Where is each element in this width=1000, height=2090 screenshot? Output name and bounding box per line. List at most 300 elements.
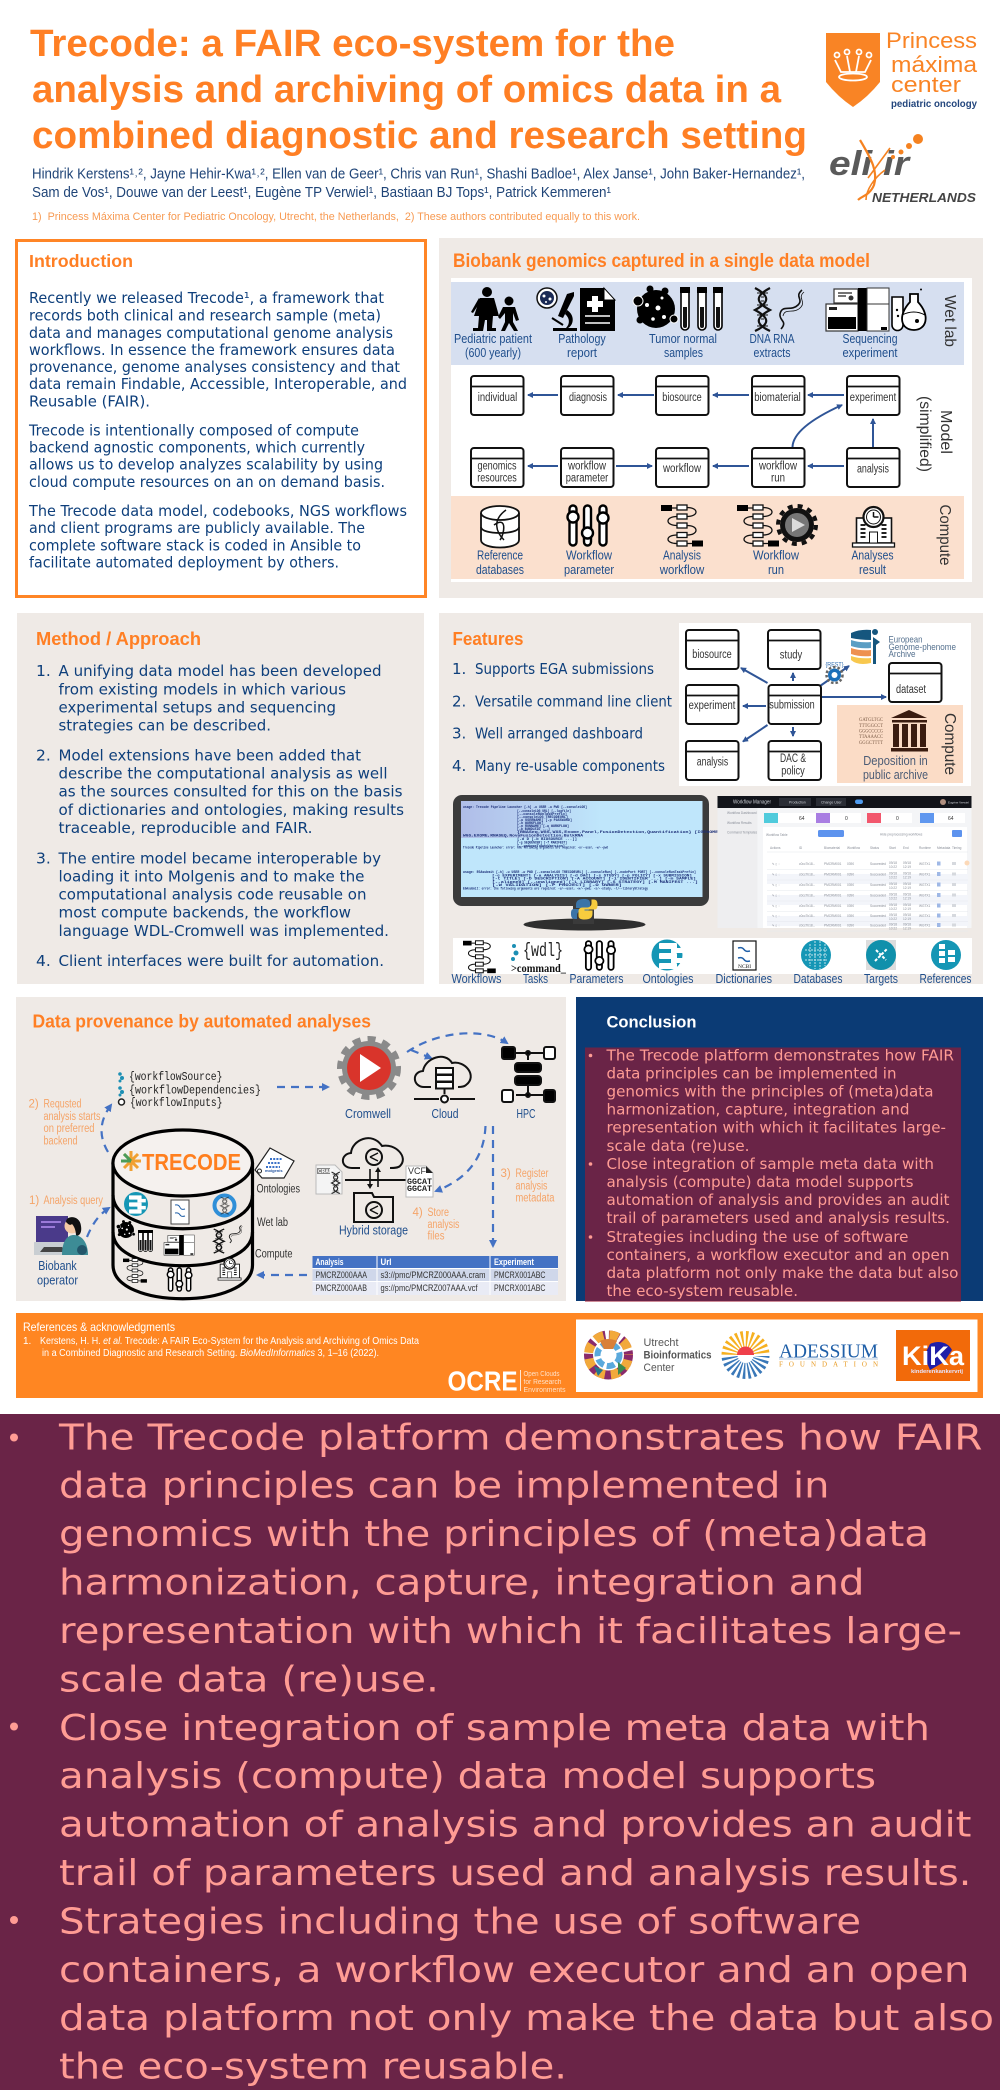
table: analysis metadata: s3://pmc/PMCRZ000AAA.cram <box>380 1270 486 1280</box>
text: terminal output: [-n RUNNAME] [-w WORKFLOW] <box>517 824 569 829</box>
list: method steps: A unifying data model has been developed <box>58 662 382 680</box>
list: method steps <box>36 662 404 970</box>
boxes: EGA model <box>686 630 942 780</box>
cards: status counters: 0 <box>845 816 848 822</box>
logo: OCRE: for Research <box>524 1379 562 1386</box>
panel: data provenance <box>16 997 566 1301</box>
highlight box: conclusion text: Close integration of sample meta data with <box>606 1155 934 1173</box>
text: sequences <box>859 718 884 746</box>
list: features: 4. <box>452 757 466 775</box>
arrows: dashed flow <box>87 1033 507 1275</box>
annotation: register metadata: analysis <box>516 1180 548 1192</box>
labels: EGA boxes <box>689 649 927 778</box>
list: method steps: most compute backends, the workflow <box>58 904 351 922</box>
table: analysis metadata: gs://pmc/PMCRZ007AAA.vcf <box>380 1283 478 1293</box>
icon: sequencing experiment <box>826 288 926 331</box>
text: references: References & acknowledgments <box>23 1320 175 1334</box>
annotation: store analysis files: analysis <box>428 1219 460 1231</box>
label: hybrid storage: Hybrid storage <box>339 1222 408 1238</box>
text block: introduction: workflows. In essence the framework ensures data <box>29 342 395 359</box>
icon: HPC <box>502 1047 555 1102</box>
text block: introduction: Trecode is intentionally composed of compute <box>28 422 359 440</box>
text: sequences: GATGLTGC <box>859 718 884 723</box>
text: terminal output: [--aligned] [--unaligned] [-L LIBRARY] [-S STRATEGY] [-M MANIFEST ...] <box>492 880 698 885</box>
heading: introduction: Introduction <box>29 251 133 271</box>
text block: conclusion enlarged: automation of analysis and provides an audit <box>59 1804 972 1846</box>
highlight box: conclusion text: harmonization, capture, integration and <box>606 1100 910 1118</box>
labels: model boxes: biomaterial <box>754 392 801 404</box>
labels: wet lab: Pathology <box>558 331 606 346</box>
icon: VCF file: GGCAT <box>407 1178 432 1187</box>
table: workflow table: Metadata <box>937 846 951 850</box>
title: analysis and archiving of omics data in a <box>32 69 782 111</box>
icon: parameters <box>584 941 615 970</box>
list: method steps: describe the computational analysis as well <box>58 764 388 782</box>
table: workflow table: Hide preprocessing workflows <box>880 832 923 836</box>
box: compute deposition: Compute <box>941 713 958 775</box>
icon: references <box>931 940 961 970</box>
annotation: register metadata: 3) <box>500 1168 511 1180</box>
icon: databases <box>801 940 831 970</box>
highlight box: conclusion text: Strategies including the use of software <box>606 1228 908 1246</box>
text: dashboard header: Change User <box>821 800 842 804</box>
logo: OCRE: Open Clouds <box>524 1371 560 1378</box>
table: workflow table: Workflow <box>847 846 861 850</box>
labels: compute: result <box>859 562 886 577</box>
logo: Utrecht Bioinformatics Center <box>588 1335 712 1376</box>
labels: wet lab <box>454 331 898 360</box>
table: analysis metadata: Experiment <box>494 1257 534 1267</box>
icon: DNA RNA extracts <box>755 288 804 331</box>
icon: wdl tasks <box>511 940 567 975</box>
table: workflow table: Workflow Table <box>766 833 788 837</box>
text block: introduction: facilitate automated deployment by others. <box>29 554 339 572</box>
title: combined diagnostic and research setting <box>32 115 807 157</box>
annotation: register metadata: metadata <box>516 1192 555 1204</box>
text block: conclusion enlarged: scale data (re)use. <box>59 1660 439 1700</box>
list: features: 2. <box>452 692 466 710</box>
label: biobank operator: operator <box>37 1272 79 1288</box>
cards: status counters: 0 <box>896 816 899 822</box>
table: workflow table: End <box>903 846 909 850</box>
labels: compute: Analysis <box>663 548 701 562</box>
list: features: 1. <box>452 660 466 678</box>
logo: Utrecht Bioinformatics Center: Bioinformatics <box>644 1350 712 1362</box>
logo: KiKa: kinderenkankervrij <box>911 1369 964 1375</box>
text: terminal output: [--genomeTokenVersion] <box>517 844 565 849</box>
text: terminal output: [-u USERNAME] [-p PASSWORD] <box>517 818 572 823</box>
label: model vertical: (simplified) <box>916 396 933 472</box>
icon: archive temple <box>891 710 928 752</box>
labels: database layers: Ontologies <box>256 1184 300 1196</box>
panel: enlarged conclusion text <box>0 1414 1000 2090</box>
icon: tumor normal samples <box>633 286 723 330</box>
labels: components: Targets <box>864 971 898 986</box>
text: sequences: GGGCTTTT <box>859 741 883 746</box>
labels: wet lab: Sequencing <box>842 331 898 346</box>
list: method steps: strategies can be described. <box>58 716 271 734</box>
icon: pediatric patient <box>471 287 519 331</box>
text: terminal output: [--consoleLOG_TRECODEURL] <box>517 815 568 820</box>
labels: wet lab: Pediatric patient <box>454 331 532 346</box>
table: analysis metadata: Url <box>380 1257 392 1267</box>
labels: compute <box>476 548 894 577</box>
labels: model boxes: parameter <box>566 472 608 484</box>
annotation: analysis query <box>29 1195 103 1207</box>
text: sequences: TTTGGCCT <box>859 724 883 729</box>
text: terminal output: Trecode Pipeline Launcher: error: the following arguments are required: -u/--user, -w/--pwd <box>463 846 608 850</box>
icon: dictionaries: NCBI <box>738 964 751 970</box>
heading: features: Features <box>452 628 524 649</box>
logo: Adessium Foundation <box>721 1339 878 1380</box>
diagram: data model <box>471 376 954 487</box>
labels: backends: Cromwell <box>345 1106 391 1121</box>
logo: European Genome-phenome Archive: Archive <box>888 649 916 660</box>
icon: VCF file: VCF <box>408 1166 427 1176</box>
labels: components: Parameters <box>570 971 624 986</box>
table: workflow table: Status <box>870 846 879 850</box>
labels: model boxes <box>477 392 897 484</box>
text block: introduction: provenance, genome analyses consistency and that <box>29 359 400 376</box>
annotation: register metadata: Register <box>516 1168 549 1180</box>
labels: compute: Workflow <box>753 548 800 562</box>
text block: introduction: data remain Findable, Accessible, Interoperable, and <box>29 376 407 393</box>
annotation: register metadata <box>500 1168 555 1204</box>
icon: ontologies <box>652 940 683 970</box>
text: terminal output: WGS,EXOME,RNASEQ,NovaFusionDetection,BulkRNA <box>463 834 584 838</box>
labels: database layers: Wet lab <box>257 1217 288 1229</box>
labels: wet lab: report <box>567 345 597 360</box>
table: analysis metadata: Analysis <box>316 1257 344 1267</box>
labels: EGA boxes: submission <box>769 700 815 712</box>
label: biobank operator <box>37 1258 79 1288</box>
text block: introduction: complete software stack is coded in Ansible to <box>29 538 361 554</box>
text: terminal output: EGAsubmit: error: the following arguments are required: -u/--user, -w/--pwd, -s/--study, -l/--libraryStrategy <box>463 886 649 892</box>
text block: introduction: and client programs are publicly available. The <box>29 520 365 537</box>
icons: wet lab layer <box>116 1220 242 1255</box>
labels: model boxes: individual <box>478 392 517 404</box>
logo: Princess Maxima Center <box>826 28 978 110</box>
text: terminal output: usage: Trecode Pipeline Launcher [-h] -u USER -w PWD [--consoleLOG] <box>463 805 587 810</box>
label: wet lab vertical: Wet lab <box>941 295 958 347</box>
icon: workflows <box>463 941 496 973</box>
text block: conclusion enlarged: data platform not only make the data but also <box>59 1998 994 2039</box>
table: workflow table: Runtime <box>919 846 931 850</box>
label: model vertical: Model <box>937 410 954 454</box>
boxes: model row 1 <box>471 376 900 415</box>
heading: biobank: Biobank genomics captured in a single data model <box>453 251 870 272</box>
labels: EGA boxes: policy <box>781 766 805 778</box>
labels: model boxes: run <box>771 472 785 484</box>
panel: features <box>439 613 983 986</box>
logo: Adessium Foundation: FOUNDATION <box>779 1360 878 1368</box>
text block: introduction: cloud compute resources on an on demand basis. <box>29 474 385 491</box>
labels: backends: Cloud <box>432 1106 458 1121</box>
labels: backends <box>345 1106 536 1121</box>
labels: model boxes: workflow <box>662 463 702 475</box>
icon: pathology report <box>537 288 615 331</box>
list: method steps: 4. <box>36 952 51 970</box>
labels: model boxes: biosource <box>662 392 702 404</box>
logo: ELIXIR Netherlands <box>829 134 976 205</box>
highlight box: conclusion text: representation with which it facilitates large- <box>606 1118 946 1136</box>
list: method steps: as the sources consulted for this on the basis <box>58 782 402 800</box>
highlight box: conclusion text: containers, a workflow executor and an open <box>606 1246 950 1264</box>
labels: compute: Analyses <box>852 548 894 562</box>
text block: conclusion enlarged: containers, a workflow executor and an open <box>59 1950 970 1991</box>
text block: conclusion enlarged: the eco-system reusable. <box>59 2046 567 2088</box>
label: model vertical <box>916 396 954 472</box>
text block: introduction: Reusable (FAIR). <box>29 394 150 410</box>
icons: compute layer <box>123 1258 241 1291</box>
annotation: store analysis files: Store <box>428 1207 449 1219</box>
text: dashboard header: Workflow Manager <box>733 800 771 806</box>
text: terminal output <box>463 805 724 892</box>
text: terminal output: [-g SEQUENCER] [-f MANIFEST] <box>517 840 567 846</box>
highlight box: conclusion text: automation of analysis and provides an audit <box>606 1191 950 1209</box>
text: terminal output: {RNASeq,WGS,WXS,Exome,Panel,FusionDetection,Quantification} [IGENOMES] <box>517 830 724 835</box>
list: method steps: The entire model became interoperable by <box>58 850 381 868</box>
labels: database layers: Compute <box>255 1248 292 1260</box>
labels: EGA boxes: DAC & <box>780 753 806 765</box>
icon: wdl tasks: {wdl} <box>523 940 563 962</box>
annotation: store analysis files: 4) <box>412 1207 423 1219</box>
labels: model boxes: analysis <box>857 464 889 476</box>
table: analysis metadata: PMCRX001ABC <box>494 1283 546 1293</box>
labels: compute: parameter <box>564 562 615 577</box>
boxes: model row 2 <box>471 448 900 487</box>
text block: conclusion enlarged: genomics with the principles of (meta)data <box>59 1514 929 1555</box>
text block: conclusion enlarged: The Trecode platform demonstrates how FAIR <box>58 1418 983 1458</box>
labels: compute: Reference <box>477 548 523 562</box>
diagram: EGA submission <box>679 623 971 786</box>
affiliations: 1) Princess Máxima Center for Pediatric Oncology, Utrecht, the Netherlands, 2) These authors contributed equally to this work. <box>32 211 640 223</box>
labels: EGA boxes: study <box>780 650 802 662</box>
icon: Trecode flower <box>121 1151 141 1171</box>
annotation: requested analysis: backend <box>44 1136 78 1148</box>
text: references: in a Combined Diagnostic and Research Setting. BioMedInformatics 3, 1–16 (2022). <box>42 1348 379 1359</box>
panel: method / approach <box>17 613 424 984</box>
icon: VCF file <box>406 1166 433 1197</box>
text block: introduction: data and manages computational genome analysis <box>29 325 393 342</box>
logo: KiKa <box>896 1330 970 1381</box>
text block: introduction: The Trecode data model, codebooks, NGS workflows <box>28 503 407 520</box>
table: workflow table: Actions <box>770 846 781 850</box>
annotation: analysis query: 1) <box>29 1195 39 1207</box>
label: biobank operator: Biobank <box>38 1258 77 1273</box>
labels: EGA boxes: dataset <box>896 684 927 696</box>
icon: REST gear <box>826 662 844 683</box>
highlight box: conclusion text: trail of parameters used and analysis results. <box>606 1209 950 1227</box>
cards: status counters: 64 <box>948 816 954 822</box>
text block: conclusion enlarged: representation with which it facilitates large- <box>59 1611 962 1652</box>
labels: wet lab: (600 yearly) <box>465 345 521 360</box>
highlight box: conclusion text: scale data (re)use. <box>606 1137 750 1155</box>
table: analysis metadata: PMCRZ000AAA <box>316 1270 367 1280</box>
logo: Adessium Foundation: ADESSIUM <box>779 1340 878 1362</box>
icon: Cromwell gear <box>340 1039 398 1097</box>
annotation: requested analysis: Requsted <box>44 1098 82 1110</box>
labels: model boxes: diagnosis <box>569 392 607 404</box>
text: references: 1. <box>23 1336 31 1347</box>
text: terminal output: [-h WORKFLOW] <box>517 821 543 826</box>
authors <box>32 166 805 201</box>
text: dashboard sidebar: Workflow Results <box>727 821 752 825</box>
heading: method: Method / Approach <box>36 628 201 649</box>
icons: ontology layer <box>124 1192 234 1224</box>
arrows: submission relations <box>741 666 886 742</box>
highlight box: conclusion text: analysis (compute) data model supports <box>606 1173 914 1191</box>
labels: model boxes: workflow <box>567 460 607 472</box>
authors: Sam de Vos¹, Douwe van der Leest¹, Eugène TP Verwiel¹, Bastiaan BJ Tops¹, Patrick Kemmeren¹ <box>32 185 611 201</box>
icon: REST gear: {REST} <box>826 662 844 668</box>
icon: wdl tasks: >command_ <box>511 961 567 975</box>
list: method steps: Client interfaces were built for automation. <box>58 952 384 970</box>
labels: model boxes: resources <box>477 472 517 484</box>
text: dashboard sidebar: Workflow Dashboard <box>727 811 757 815</box>
icon: analysis workflow <box>661 505 703 546</box>
logo text: TRECODE: TRECODE <box>142 1149 241 1175</box>
text: references: Kerstens, H. H. et al. Trecode: A FAIR Eco-System for the Analysis and Archiving of Omics Data <box>40 1336 419 1347</box>
icon: dictionaries <box>733 941 756 970</box>
logo: Utrecht Bioinformatics Center: Utrecht <box>644 1337 678 1349</box>
icon: reference databases <box>481 506 519 548</box>
annotation: requested analysis: analysis starts <box>44 1111 101 1123</box>
table: workflow table <box>763 827 968 931</box>
labels: model boxes: experiment <box>850 392 897 404</box>
text block: introduction: backend agnostic components, which currently <box>29 440 365 456</box>
icon: crown shield <box>826 33 880 107</box>
labels: model boxes: workflow <box>758 460 798 472</box>
panel: introduction <box>16 240 426 596</box>
text: workflow files: {workflowSource} <box>129 1071 222 1084</box>
text: terminal output: [-d D [-b BIOSOURCE ...]] <box>517 837 577 842</box>
logo: Princess Maxima Center: Princess <box>886 28 977 53</box>
logo: OCRE: Environments <box>524 1387 566 1394</box>
labels: components: Tasks <box>523 971 548 986</box>
text: terminal output: [-e EXPERIMENT] [-a ANALYSIS] [-d DAC] [-s STUDY] [-p POLICY] [-x SUBMISSION] <box>492 874 692 878</box>
table: workflow table: Biomaterial <box>824 846 840 850</box>
title <box>30 23 807 157</box>
icon: workflow run <box>737 505 816 546</box>
logo: ELIXIR Netherlands: eli ir <box>829 145 911 183</box>
list: method steps: 1. <box>36 662 51 680</box>
labels: compute: databases <box>476 562 524 577</box>
text block: conclusion enlarged: harmonization, capture, integration and <box>59 1562 864 1604</box>
arrows: model relations <box>528 395 873 466</box>
logo: European Genome-phenome Archive: European <box>888 634 922 646</box>
labels: wet lab: DNA RNA <box>750 331 795 346</box>
box: compute deposition: public archive <box>863 767 928 782</box>
list: features: Many re-usable components <box>475 757 665 775</box>
table: workflow table: Timing <box>952 846 962 850</box>
labels: components: References <box>920 971 972 986</box>
logo: European Genome-phenome Archive: Genome-phenome <box>888 642 956 653</box>
band: compute <box>451 496 964 579</box>
title: Trecode: a FAIR eco-system for the <box>30 23 675 65</box>
text: dashboard header: Eugène Verwiel <box>948 800 969 804</box>
box: compute deposition <box>837 705 963 783</box>
text: terminal output: usage: EGAsubmit [-h] -u USER -w PWD [--consoleLOG TRECODEURL] [--consoleRun] [--nodePort PORT] [--consoleRunTaskPrefix] <box>463 870 696 875</box>
labels: wet lab: extracts <box>754 345 791 360</box>
text block: introduction <box>28 290 407 572</box>
logo: Princess Maxima Center: center <box>891 72 961 97</box>
text: sequences: TTAAAACC <box>859 735 884 740</box>
text: workflow files: {workflowInputs} <box>130 1097 222 1110</box>
list: method steps: traceable, reproducible and FAIR. <box>58 819 312 837</box>
highlight box: conclusion text: the eco-system reusable. <box>606 1282 798 1300</box>
text block: introduction: records both clinical and research sample (meta) <box>29 308 381 324</box>
text block: conclusion enlarged: analysis (compute) data model supports <box>59 1756 876 1797</box>
list: method steps: 2. <box>36 746 51 764</box>
list: features <box>452 660 672 775</box>
annotation: analysis query: Analysis query <box>44 1195 103 1207</box>
text block: conclusion enlarged: Close integration of sample meta data with <box>59 1708 930 1749</box>
labels: components: Ontologies <box>642 971 694 986</box>
heading: provenance: Data provenance by automated analyses <box>32 1010 371 1032</box>
labels: components: Workflows <box>452 971 502 986</box>
illustration: command line monitor <box>453 795 724 930</box>
list: method steps: language WDL-Cromwell was implemented. <box>58 922 389 940</box>
list: method steps: loading it into Molgenis and to make the <box>58 868 364 886</box>
labels: wet lab: Tumor normal <box>649 331 717 346</box>
text block: conclusion enlarged <box>58 1418 994 2088</box>
icon: molgenis tag <box>255 1148 294 1178</box>
text: dashboard header <box>733 798 969 806</box>
list: features: Well arranged dashboard <box>475 724 643 742</box>
logo: ELIXIR Netherlands: NETHERLANDS <box>872 190 976 205</box>
labels: compute: Workflow <box>566 548 613 562</box>
logo: KiKa: KiKa <box>902 1341 965 1371</box>
list: method steps: 3. <box>36 850 51 868</box>
band: wet lab <box>451 282 964 365</box>
text: dashboard sidebar <box>727 811 757 834</box>
panel: references and acknowledgments <box>16 1313 983 1398</box>
highlight box: conclusion text: data platform not only make the data but also <box>606 1264 958 1282</box>
text block: conclusion enlarged: data principles can be implemented in <box>59 1466 830 1506</box>
text block: conclusion enlarged: Strategies including the use of software <box>59 1902 861 1942</box>
list: method steps: experimental setups and sequencing <box>58 698 336 716</box>
logo: Utrecht Bioinformatics Center: Center <box>644 1362 675 1374</box>
annotation: requested analysis: on preferred <box>44 1123 94 1135</box>
labels: components: Databases <box>794 971 843 986</box>
cards: status counters <box>764 813 965 823</box>
heading: conclusion: Conclusion <box>606 1012 696 1032</box>
labels: EGA boxes: biosource <box>692 649 732 661</box>
labels: components: Dictionaries <box>716 971 772 986</box>
list: features: 3. <box>452 724 466 742</box>
highlight box: conclusion text: The Trecode platform demonstrates how FAIR <box>606 1046 954 1064</box>
list: method steps: from existing models in which various <box>58 680 346 698</box>
icon: biobank operator <box>34 1216 88 1255</box>
labels: compute: workflow <box>659 562 705 577</box>
icon: CRAM file: CRAM <box>318 1169 333 1175</box>
text: dashboard sidebar: Command Templates <box>727 830 757 834</box>
labels: backends: HPC <box>516 1106 536 1121</box>
logo: Princess Maxima Center: máxima <box>891 52 978 77</box>
text: dashboard header: Production <box>789 800 806 804</box>
list: features: Versatile command line client <box>475 692 672 710</box>
annotation: requested analysis: 2) <box>28 1098 39 1110</box>
text: references <box>23 1320 419 1359</box>
text: terminal output: [-t TITLE] [-D DESCRIPTION] [-A ACCOUNT] [-i IDENTIFIER ...] [-m SAMPLE] <box>492 876 696 882</box>
table: workflow table: ID <box>799 846 803 850</box>
bullets <box>10 1434 18 1924</box>
text: workflow files: {workflowDependencies} <box>129 1084 261 1098</box>
logo: OCRE <box>448 1366 566 1396</box>
highlight box: conclusion text: data principles can be implemented in <box>606 1064 896 1082</box>
labels: model boxes: genomics <box>478 460 517 472</box>
